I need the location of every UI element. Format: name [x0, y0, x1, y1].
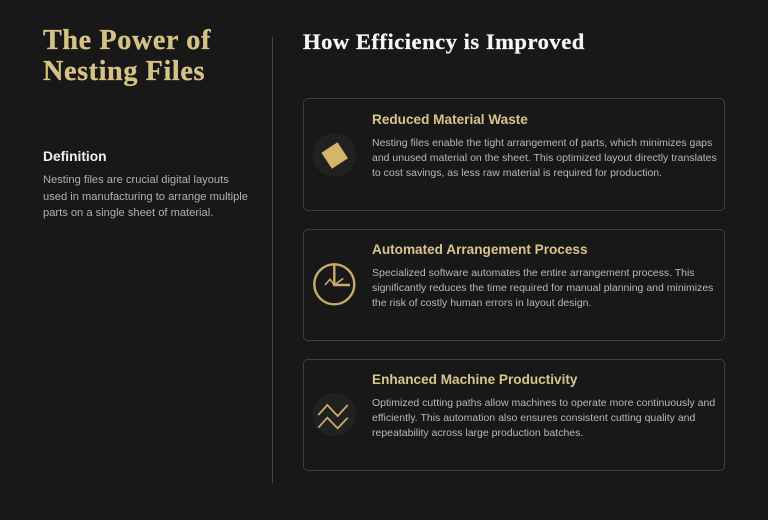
icon: rotated square [313, 134, 356, 176]
definition text: used in manufacturing to arrange multiple [43, 191, 248, 203]
card text: Optimized cutting paths allow machines to operate more continuously and [372, 396, 715, 408]
definition block [43, 149, 248, 219]
definition text: Nesting files are crucial digital layouts [43, 174, 229, 186]
card text [372, 266, 713, 308]
card text: significantly reduces the time required for manual planning and minimizes [372, 282, 713, 294]
definition text: parts on a single sheet of material. [43, 207, 213, 219]
card text [372, 396, 715, 438]
card text [372, 136, 717, 178]
card heading: Enhanced Machine Productivity [372, 372, 577, 387]
panel: automated arrangement process [303, 229, 725, 341]
definition text [43, 174, 248, 219]
card heading: Reduced Material Waste [372, 112, 528, 127]
icon: clock [313, 263, 356, 306]
card text: efficiently. This automation also ensures consistent cutting quality and [372, 412, 695, 424]
card heading: Automated Arrangement Process [372, 242, 588, 257]
icon: zigzag lines [313, 393, 356, 436]
title: The Power of [43, 25, 211, 56]
card text: Nesting files enable the tight arrangement of parts, which minimizes gaps [372, 136, 712, 148]
card text: Specialized software automates the entire arrangement process. This [372, 266, 695, 278]
panel: enhanced machine productivity [303, 359, 725, 471]
card text: to cost savings, as less raw material is required for production. [372, 166, 662, 178]
title: Nesting Files [43, 56, 205, 87]
section heading: How Efficiency is Improved [303, 29, 585, 54]
card text: and unused material on the sheet. This optimized layout directly translates [372, 152, 717, 164]
card text: repeatability across large production batches. [372, 426, 583, 438]
title [43, 25, 211, 87]
panel: reduced material waste [303, 98, 725, 211]
card text: the risk of costly human errors in layout design. [372, 296, 591, 308]
definition heading: Definition [43, 149, 107, 164]
